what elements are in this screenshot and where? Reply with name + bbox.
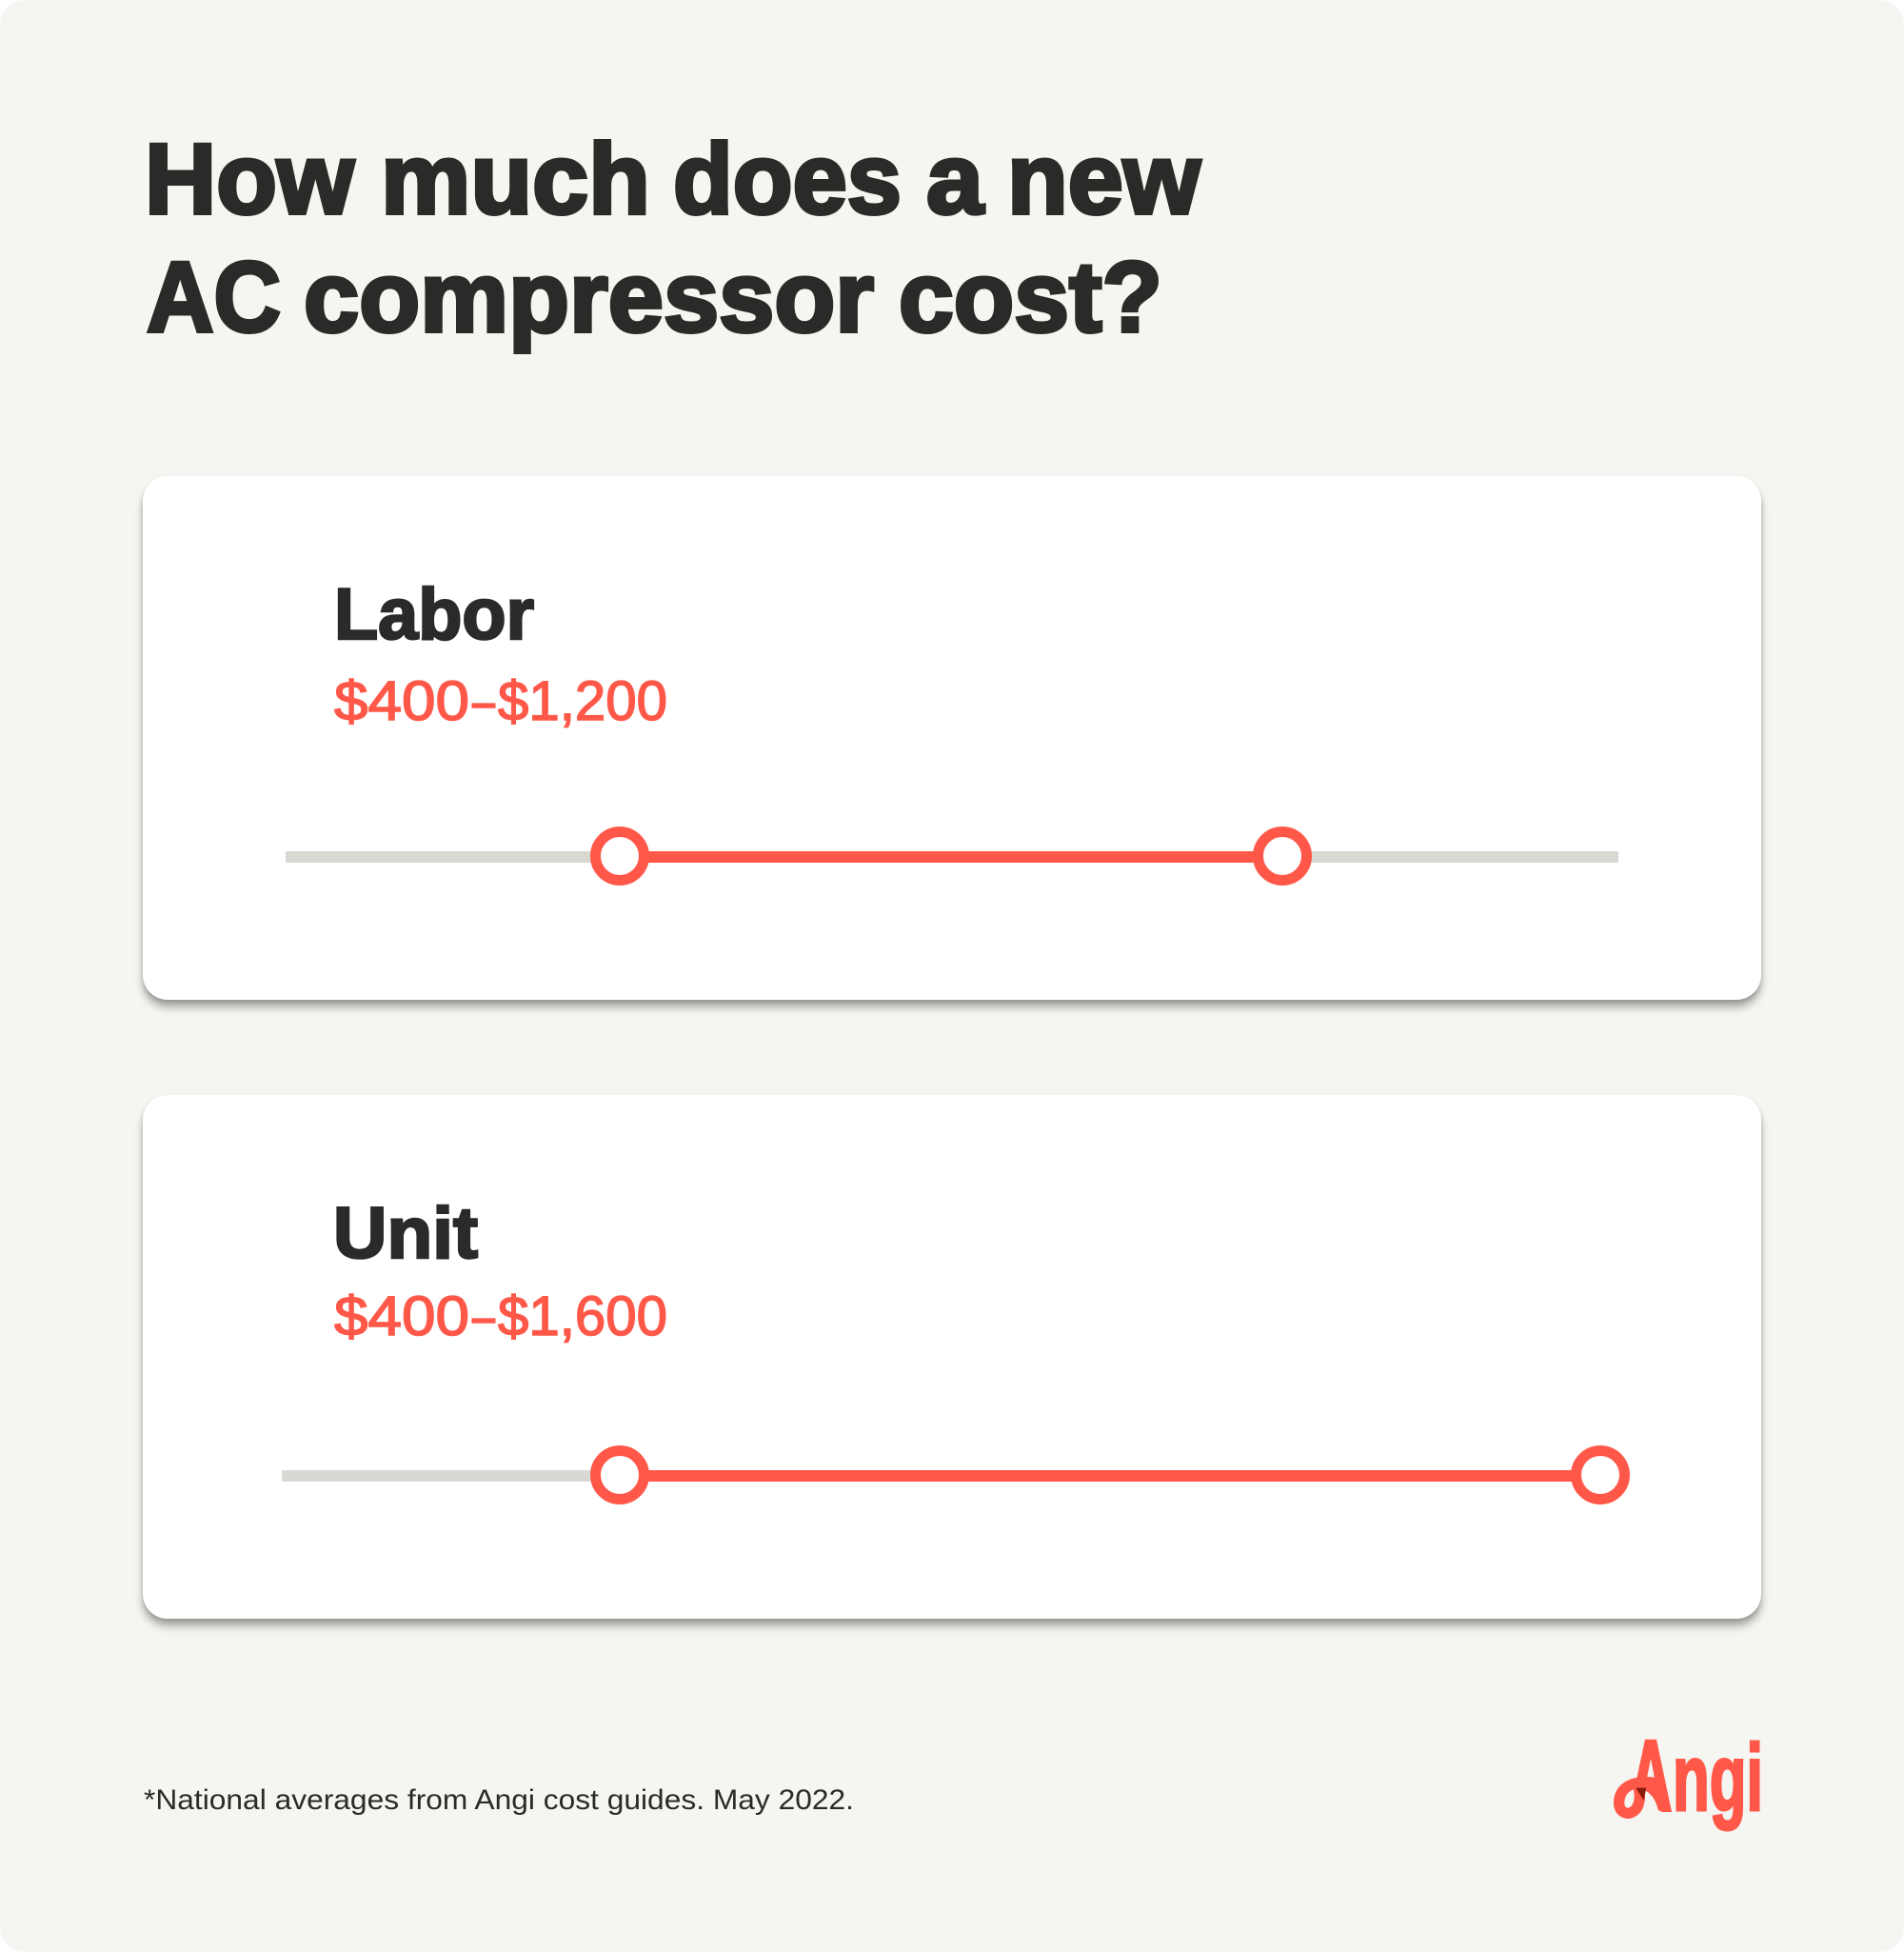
title (145, 124, 1200, 353)
title: a (926, 124, 985, 235)
title: compressor (304, 242, 874, 353)
title: does (673, 124, 902, 235)
logo: Angi (1614, 1739, 1759, 1832)
unit price range: $1,600 (498, 1285, 667, 1347)
unit price range: – (472, 1285, 496, 1347)
unit heading: Unit (333, 1193, 478, 1274)
title: new (1007, 124, 1200, 235)
labor price range: – (472, 670, 496, 732)
unit price range (334, 1285, 667, 1347)
title: AC (147, 242, 281, 353)
labor price range (334, 670, 667, 732)
title: cost? (899, 242, 1162, 353)
logo: Angi: ngi (1673, 1724, 1763, 1830)
unit price range: $400 (334, 1285, 469, 1347)
panel: labor card (143, 476, 1761, 1000)
title: How (145, 124, 354, 235)
labor price range: $1,200 (498, 670, 667, 732)
logo: Angi: A (1630, 1721, 1672, 1832)
labor price range: $400 (334, 670, 469, 732)
panel: unit card (143, 1095, 1761, 1619)
title: much (381, 124, 650, 235)
labor heading: Labor (334, 574, 534, 655)
footnote: *National averages from Angi cost guides. May 2022. (144, 1784, 854, 1816)
unit range slider (282, 1451, 1624, 1499)
labor range slider (286, 832, 1618, 880)
